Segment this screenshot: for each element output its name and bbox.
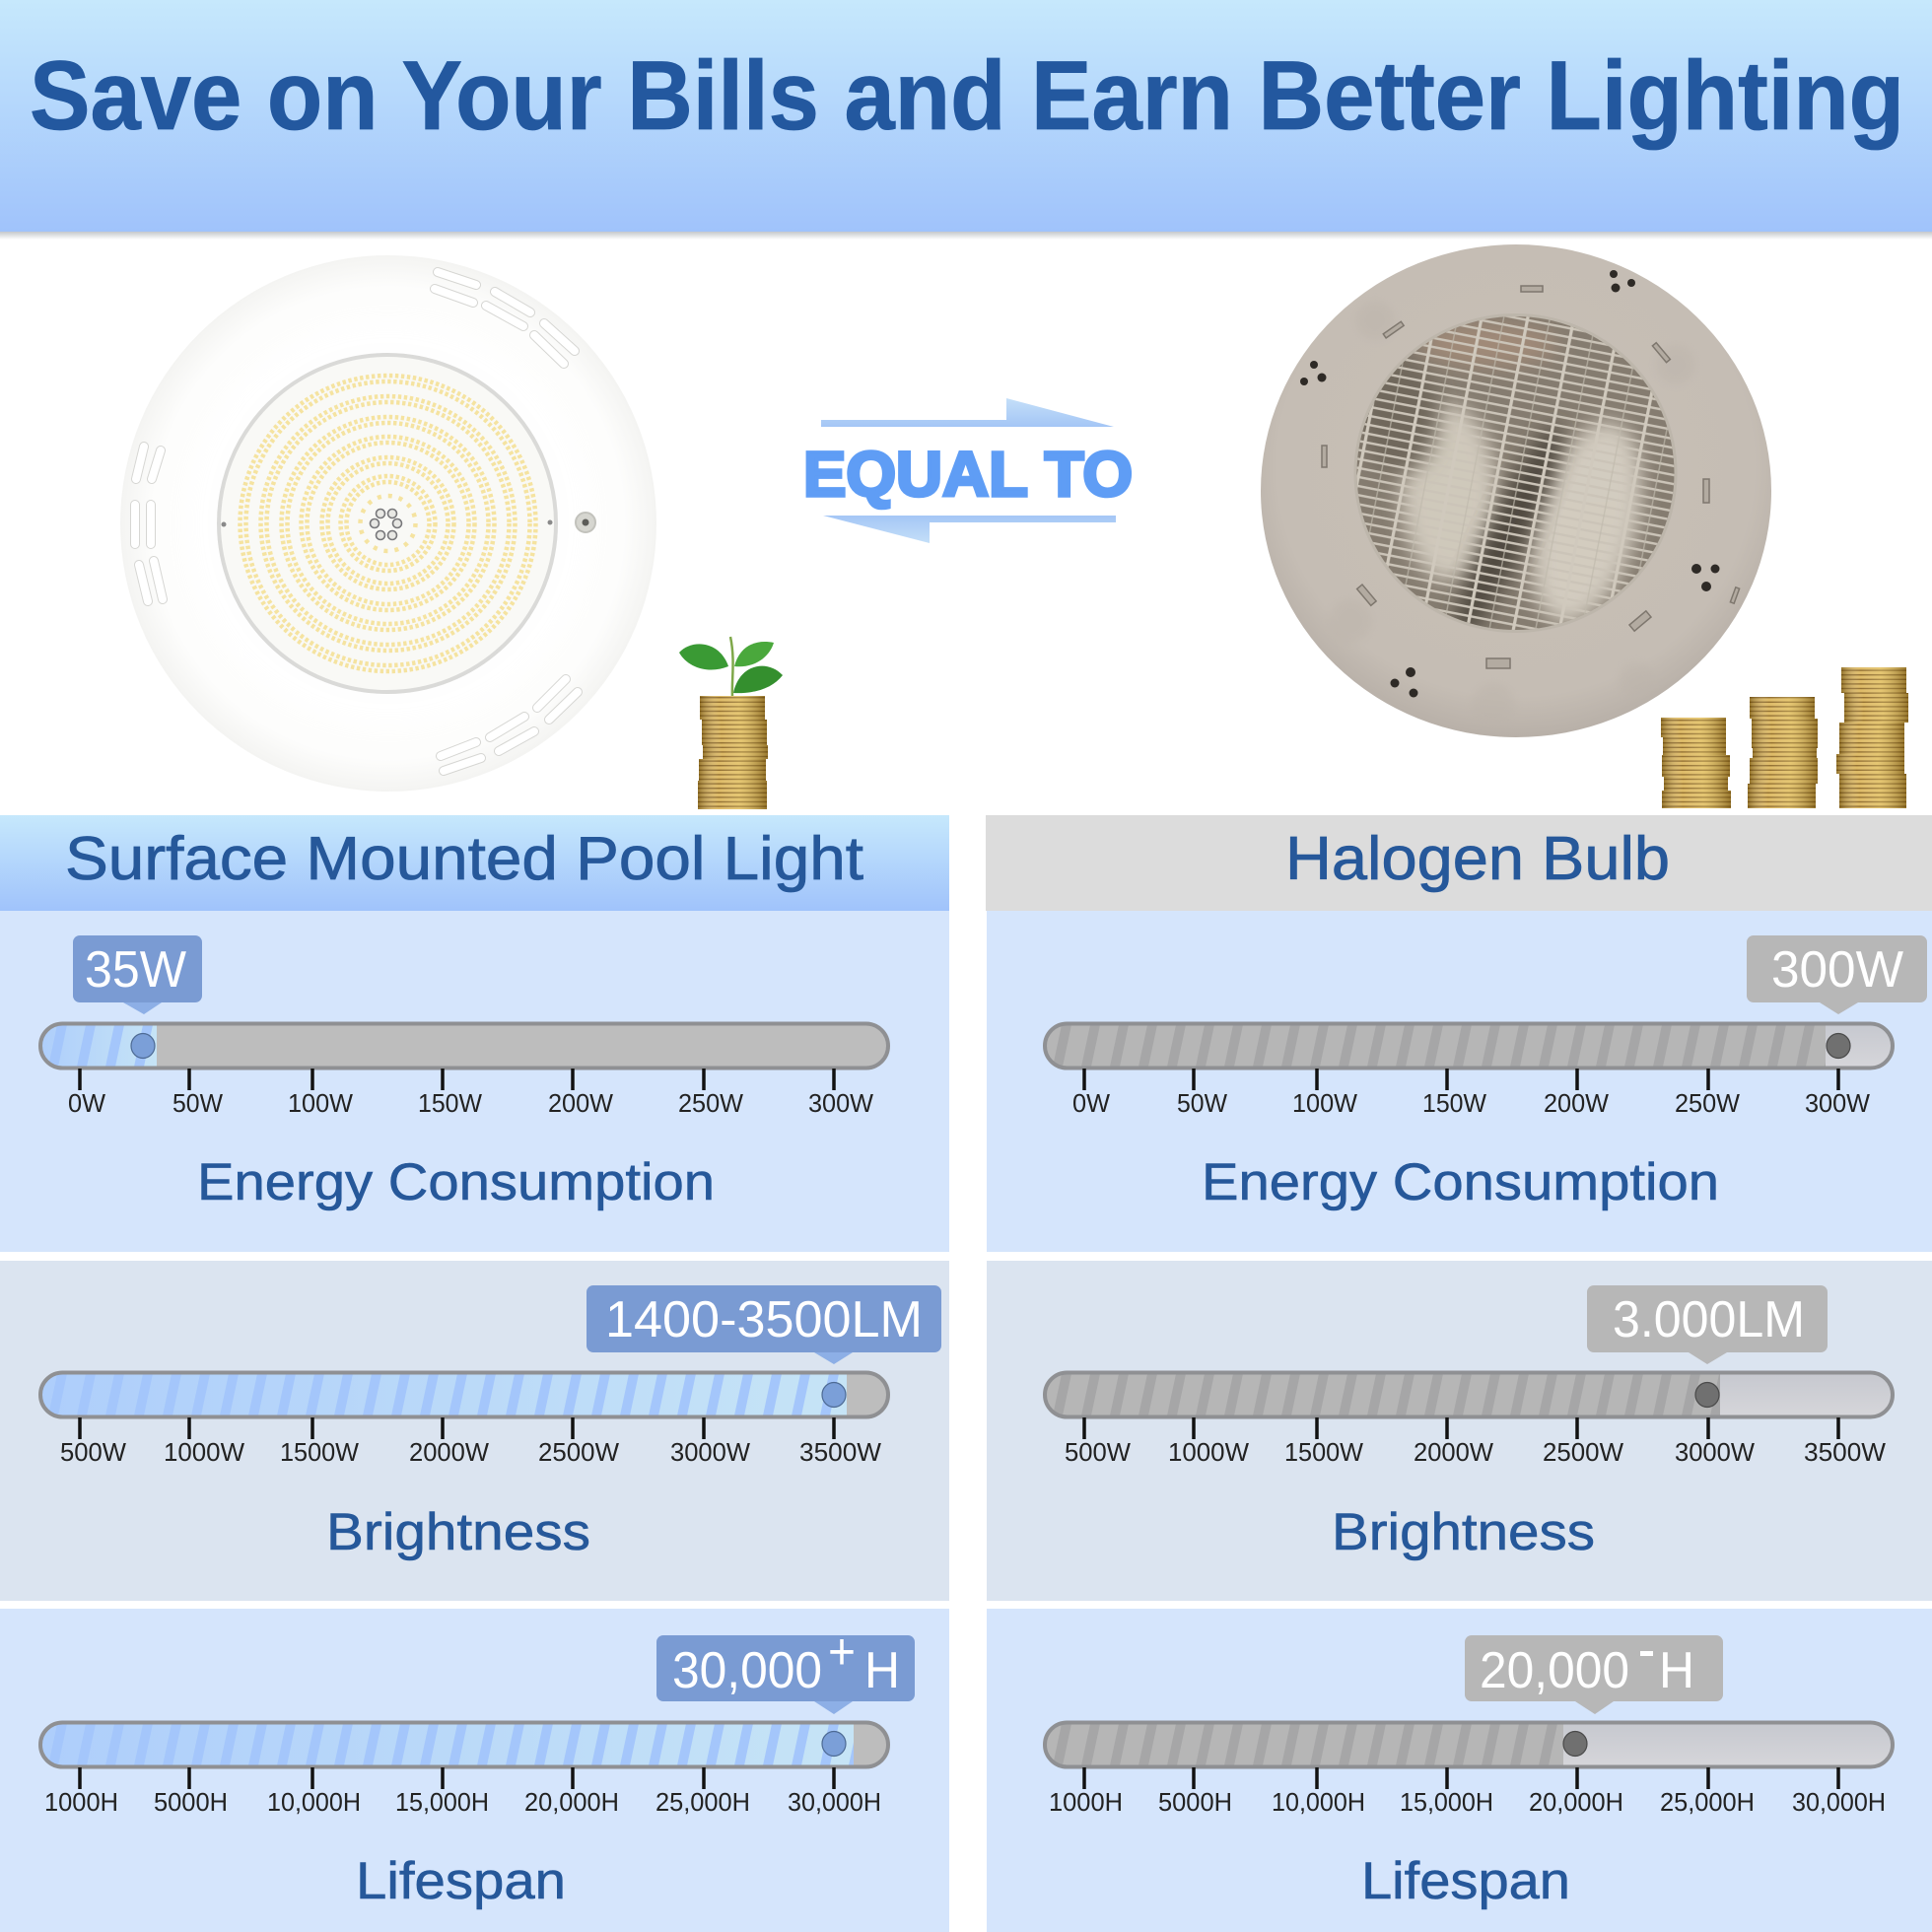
column heading <box>0 815 949 911</box>
column heading: Halogen Bulb <box>1285 825 1670 893</box>
coin stack 2 <box>1748 697 1818 808</box>
callout: 300W: 300W <box>1771 941 1903 999</box>
scale ticks and labels: 250W <box>678 1088 743 1118</box>
product photo: halogen bulb pool light <box>1261 244 1771 737</box>
scale ticks and labels <box>44 1767 881 1817</box>
scale ticks and labels: 200W <box>1544 1088 1609 1118</box>
callout: 30,000+ H: 30,000 <box>672 1642 822 1699</box>
scale ticks and labels: 20,000H <box>1529 1787 1623 1817</box>
scale ticks and labels: 3000W <box>670 1437 750 1467</box>
callout: 30,000+ H <box>656 1623 915 1714</box>
callout: 30,000+ H: H <box>864 1642 900 1699</box>
slider bar <box>40 1022 888 1069</box>
scale ticks and labels: 30,000H <box>1792 1787 1886 1817</box>
scale ticks and labels: 300W <box>1805 1088 1870 1118</box>
panel: halogen bulb column <box>986 815 1932 1932</box>
arrows: equal to <box>803 398 1133 543</box>
product photo: LED surface mounted pool light <box>120 255 656 792</box>
callout: 20,000- H: 20,000 <box>1480 1642 1629 1699</box>
header band <box>0 0 1932 240</box>
scale ticks and labels: 200W <box>548 1088 613 1118</box>
scale ticks and labels: 50W <box>172 1088 223 1118</box>
metric label: Energy Consumption <box>1202 1153 1719 1211</box>
scale ticks and labels <box>68 1069 873 1118</box>
scale ticks and labels: 500W <box>60 1437 126 1467</box>
scale ticks and labels: 0W <box>1072 1088 1110 1118</box>
panel: LED brightness <box>0 1261 949 1601</box>
scale ticks and labels <box>60 1417 881 1467</box>
icon: three rising coin stacks <box>1661 667 1908 808</box>
scale ticks and labels: 3500W <box>1804 1437 1886 1467</box>
scale ticks and labels: 30,000H <box>788 1787 881 1817</box>
scale ticks and labels: 10,000H <box>1272 1787 1365 1817</box>
callout: 3.000LM: 3.000LM <box>1613 1291 1805 1348</box>
scale ticks and labels: 2000W <box>409 1437 489 1467</box>
scale ticks and labels: 1500W <box>280 1437 359 1467</box>
panel: surface mounted pool light column <box>0 815 949 1932</box>
scale ticks and labels: 15,000H <box>1400 1787 1493 1817</box>
metric label: Lifespan <box>1361 1852 1570 1910</box>
slider bar <box>40 1721 888 1767</box>
scale ticks and labels: 1000H <box>1049 1787 1123 1817</box>
scale ticks and labels: 1000W <box>1168 1437 1249 1467</box>
icon: plant growing from small coin stack <box>679 637 783 809</box>
scale ticks and labels: 150W <box>1422 1088 1486 1118</box>
scale ticks and labels: 5000H <box>154 1787 228 1817</box>
label: equal to: EQUAL TO <box>803 439 1133 510</box>
callout: 1400-3500LM <box>586 1285 941 1364</box>
coin stack 1 <box>1661 718 1731 808</box>
scale ticks and labels: 1500W <box>1284 1437 1363 1467</box>
slider bar <box>1045 1721 1893 1767</box>
scale ticks and labels: 15,000H <box>395 1787 489 1817</box>
scale ticks and labels: 2500W <box>538 1437 619 1467</box>
scale ticks and labels: 3500W <box>799 1437 881 1467</box>
metric label: Energy Consumption <box>197 1153 715 1211</box>
scale ticks and labels: 25,000H <box>656 1787 750 1817</box>
metric label: Brightness <box>1332 1503 1595 1561</box>
scale ticks and labels: 1000H <box>44 1787 118 1817</box>
metric label: Lifespan <box>356 1852 566 1910</box>
scale ticks and labels: 300W <box>808 1088 873 1118</box>
scale ticks and labels: 25,000H <box>1660 1787 1755 1817</box>
callout: 3.000LM <box>1587 1285 1828 1364</box>
scale ticks and labels: 250W <box>1675 1088 1740 1118</box>
scale ticks and labels: 100W <box>1292 1088 1357 1118</box>
column heading <box>986 815 1932 911</box>
scale ticks and labels: 5000H <box>1158 1787 1232 1817</box>
callout: 300W <box>1747 935 1927 1014</box>
panel: halogen lifespan <box>987 1609 1932 1932</box>
scale ticks and labels <box>1049 1767 1886 1817</box>
coin stack 3 <box>1836 667 1908 808</box>
scale ticks and labels: 2500W <box>1543 1437 1623 1467</box>
scale ticks and labels <box>1065 1417 1886 1467</box>
callout: 35W <box>73 935 202 1014</box>
callout: 30,000+ H: + <box>828 1623 856 1681</box>
scale ticks and labels: 3000W <box>1675 1437 1755 1467</box>
panel: halogen brightness <box>987 1261 1932 1601</box>
scale ticks and labels: 500W <box>1065 1437 1131 1467</box>
panel: LED energy consumption <box>0 911 949 1252</box>
callout: 20,000- H <box>1465 1635 1723 1714</box>
scale ticks and labels: 50W <box>1177 1088 1227 1118</box>
panel: LED lifespan <box>0 1609 949 1932</box>
scale ticks and labels: 100W <box>288 1088 353 1118</box>
scale ticks and labels: 150W <box>418 1088 482 1118</box>
slider bar <box>1045 1371 1893 1417</box>
scale ticks and labels: 20,000H <box>524 1787 619 1817</box>
column heading: Surface Mounted Pool Light <box>65 825 863 893</box>
panel: halogen energy consumption <box>987 911 1932 1252</box>
scale ticks and labels: 2000W <box>1414 1437 1493 1467</box>
slider bar <box>1045 1022 1893 1069</box>
scale ticks and labels: 1000W <box>164 1437 244 1467</box>
scale ticks and labels <box>1072 1069 1870 1118</box>
slider bar <box>40 1371 888 1417</box>
callout: 1400-3500LM: 1400-3500LM <box>605 1291 923 1348</box>
callout: 20,000- H: H <box>1659 1642 1694 1699</box>
scale ticks and labels: 10,000H <box>267 1787 361 1817</box>
metric label: Brightness <box>326 1503 590 1561</box>
scale ticks and labels: 0W <box>68 1088 105 1118</box>
callout: 35W: 35W <box>85 941 186 999</box>
